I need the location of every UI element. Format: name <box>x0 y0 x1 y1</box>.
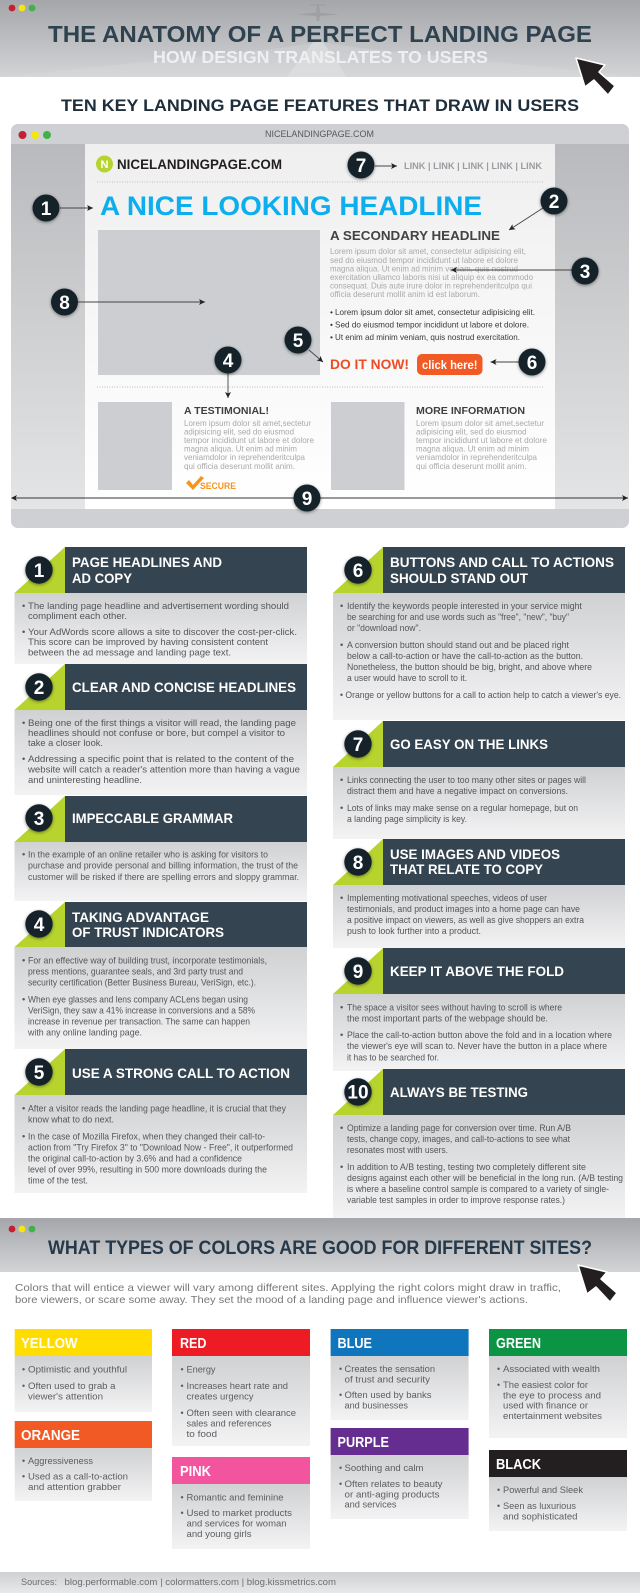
panel: 1 page headlines: • <box>22 626 25 637</box>
panel: 2 clear headlines: and uninteresting headline. <box>28 774 142 785</box>
panel: 4 trust indicators: press mentions, guarantee seals, and 3rd party trust and <box>28 966 243 976</box>
more information: adipisicing elit, sed do eiusmod <box>416 428 527 436</box>
panel: 9 above the fold: Place the call-to-action button above the fold and in a location where <box>347 1029 612 1040</box>
footer: sources: blog.performable.com | colormatters.com | blog.kissmetrics.com <box>64 1577 336 1588</box>
panel: 6 buttons: Identify the keywords people interested in your service might <box>347 600 582 611</box>
panel: 10 always be testing: ALWAYS BE TESTING <box>390 1084 528 1100</box>
card: red: • <box>180 1408 184 1418</box>
arrow: 4 <box>227 373 229 398</box>
panel: 9 above the fold <box>333 948 625 1071</box>
markers: numbered circles: 8 <box>59 293 70 314</box>
panel: 9 above the fold: the most important parts of the webpage should be. <box>347 1012 548 1024</box>
panel: 6 buttons: • <box>340 600 343 611</box>
panel: 2 clear headlines: CLEAR AND CONCISE HEADLINES <box>72 679 296 695</box>
card: blue: and businesses <box>344 1400 409 1410</box>
markers: numbered circles: 4 <box>223 351 234 372</box>
bullet list: Ut enim ad minim veniam, quis nostrud exercitation. <box>335 332 520 342</box>
panel: 10 always be testing: Optimize a landing page for conversion over time. Run A/B <box>347 1122 571 1133</box>
panel: 6 buttons <box>333 547 625 720</box>
panel: 2 clear headlines: • <box>22 753 25 764</box>
card: blue <box>331 1329 469 1420</box>
card: purple <box>331 1428 469 1519</box>
panel: 1 page headlines: compliment each other. <box>28 610 127 621</box>
card: green: The easiest color for <box>503 1380 588 1390</box>
panel: 8 images and videos: a positive impact on viewers, as well as give shoppers an extra <box>347 914 585 925</box>
panel: 4 trust indicators: VeriSign, they saw a 41% increase in conversions and a 58% <box>28 1004 255 1016</box>
card: red: • <box>180 1381 184 1391</box>
panel: 6 buttons: A conversion button should stand out and be placed right <box>347 639 569 650</box>
panel: 3 grammar: 3 <box>34 809 44 830</box>
testimonial image <box>98 402 172 490</box>
bullet list <box>330 307 535 342</box>
card: blue: BLUE <box>338 1336 372 1352</box>
lorem paragraph: exercitation ullamco laboris nisi ut aliquip ex ea commodo <box>330 273 533 282</box>
lorem paragraph: magna aliqua. Ut enim ad minim veniam, quis nostrud <box>330 264 518 274</box>
card: pink <box>172 1457 310 1549</box>
lorem paragraph: consequat. Duis aute irure dolor in reprehenderitculpa qui <box>330 282 532 290</box>
logo: NICELANDINGPAGE.COM <box>117 156 282 172</box>
card: purple: or anti-aging products <box>344 1490 440 1500</box>
panel: 9 above the fold: it has to be searched for. <box>347 1052 439 1062</box>
intro text: bore viewers, or scare some away. They set the mood of a landing page and influence viewer's actions. <box>15 1294 528 1306</box>
arrow: 8 <box>78 301 205 303</box>
button <box>417 354 482 375</box>
panel: 6 buttons: or "download now". <box>347 622 421 633</box>
panel: 8 images and videos <box>333 839 625 948</box>
icon: cursor arrow <box>576 58 615 95</box>
panel: 10 always be testing: variable test samples in order to improve response rates.) <box>347 1194 565 1205</box>
card: red: Energy <box>186 1364 216 1374</box>
card: purple: • <box>339 1463 342 1473</box>
card: green: • <box>497 1364 500 1374</box>
panel: 4 trust indicators: TAKING ADVANTAGE <box>72 909 209 925</box>
panel: 10 always be testing <box>333 1069 625 1218</box>
card: red: Often seen with clearance <box>186 1408 296 1418</box>
card: yellow: viewer's attention <box>28 1392 103 1402</box>
card: yellow: Optimistic and youthful <box>28 1364 127 1374</box>
panel: 2 clear headlines: 2 <box>34 678 44 699</box>
panel: 5 call to action: level of over 99%, resulting in 500 more downloads during the <box>28 1164 267 1174</box>
banner title: WHAT TYPES OF COLORS ARE GOOD FOR DIFFERENT SITES? <box>48 1238 592 1259</box>
card: black: BLACK <box>496 1457 541 1473</box>
lorem paragraph: sed do eiusmod tempor incididunt ut labore et dolore <box>330 256 518 265</box>
panel: 9 above the fold: The space a visitor sees without having to scroll is where <box>347 1002 562 1012</box>
card: green: Associated with wealth <box>503 1364 600 1374</box>
call to action text: DO IT NOW! <box>330 356 409 372</box>
markers: numbered circles <box>32 152 598 512</box>
card: green: • <box>497 1380 500 1390</box>
bullet list: • <box>330 320 333 330</box>
card: pink: and services for woman <box>186 1518 287 1528</box>
testimonial: veniamdolor in reprehenderitculpa <box>184 453 305 462</box>
panel: 4 trust indicators: When eye glasses and lens company ACLens began using <box>28 994 248 1004</box>
section banner: colors <box>0 1218 640 1272</box>
card: orange: Aggressiveness <box>28 1456 94 1466</box>
panel: 7 links: Links connecting the user to too many other sites or pages will <box>347 774 586 785</box>
runway <box>287 42 347 77</box>
panel: 8 images and videos: THAT RELATE TO COPY <box>390 861 544 877</box>
testimonial <box>184 405 314 471</box>
testimonial: magna aliqua. Ut enim ad minim <box>184 444 297 454</box>
card: red: Increases heart rate and <box>186 1381 288 1391</box>
panel: 6 buttons: SHOULD STAND OUT <box>390 570 528 586</box>
markers: numbered circles: 5 <box>293 331 304 352</box>
more information: MORE INFORMATION <box>416 405 525 417</box>
panel: 4 trust indicators: • <box>22 954 25 966</box>
card: blue: Often used by banks <box>344 1390 432 1400</box>
panel: 6 buttons: BUTTONS AND CALL TO ACTIONS <box>390 554 614 570</box>
card: pink: Romantic and feminine <box>186 1492 284 1502</box>
card: pink: • <box>180 1508 184 1518</box>
card: green: used with finance or <box>503 1400 588 1410</box>
panel: 8 images and videos: 8 <box>353 853 363 874</box>
card: blue: • <box>339 1390 342 1400</box>
intro text <box>15 1282 561 1306</box>
testimonial: adipisicing elit, sed do eiusmod <box>184 428 294 436</box>
card: pink: Used to market products <box>186 1508 293 1518</box>
panel: 2 clear headlines <box>14 664 307 795</box>
card: yellow: • <box>22 1381 25 1391</box>
card: red: • <box>180 1364 184 1374</box>
panel: 5 call to action: 5 <box>34 1063 45 1084</box>
panel: 7 links: a landing page simplicity is key. <box>347 813 467 824</box>
panel: 6 buttons: a user would have to scroll to it. <box>347 672 467 683</box>
panel: 1 page headlines: 1 <box>34 561 45 582</box>
panel: 6 buttons: 6 <box>353 561 363 582</box>
panel: 10 always be testing: resonates most with users. <box>347 1144 448 1155</box>
panel: 8 images and videos: • <box>340 892 343 903</box>
section heading: ten key features: TEN KEY LANDING PAGE FEATURES THAT DRAW IN USERS <box>61 96 579 115</box>
markers: numbered circles: 6 <box>527 353 537 374</box>
panel: 1 page headlines: Your AdWords score allows a site to discover the cost-per-click. <box>28 626 297 637</box>
card: orange: and attention grabber <box>28 1482 121 1492</box>
secure badge: SECURE <box>200 481 236 491</box>
info image <box>331 402 404 490</box>
card: red: to food <box>186 1429 217 1439</box>
panel: 5 call to action: know what to do next. <box>28 1114 114 1124</box>
button: click here! <box>422 358 478 372</box>
panel: 5 call to action: time of the test. <box>28 1174 88 1186</box>
secondary headline: A SECONDARY HEADLINE <box>330 229 500 243</box>
card: black: Powerful and Sleek <box>503 1485 584 1495</box>
card: green <box>489 1329 627 1438</box>
panel: 10 always be testing: • <box>340 1122 343 1133</box>
card: orange: • <box>22 1472 25 1482</box>
panel: 3 grammar: customer will be risked if there are spelling errors and sloppy grammar. <box>28 871 299 882</box>
panel: 5 call to action: In the case of Mozilla Firefox, when they changed their call-to- <box>28 1130 265 1142</box>
panel: 8 images and videos: push to look further into a product. <box>347 925 481 936</box>
bullet list: • <box>330 332 333 342</box>
panel: 5 call to action <box>14 1049 307 1193</box>
card: orange: ORANGE <box>21 1428 80 1444</box>
banner lights <box>9 1226 35 1232</box>
card: purple: PURPLE <box>338 1435 389 1451</box>
panel: 4 trust indicators: with any online landing page. <box>27 1026 142 1038</box>
panel: 5 call to action: After a visitor reads the landing page headline, it is crucial that they <box>28 1102 286 1114</box>
panel: 2 clear headlines: website will catch a reader's attention more than having a vague <box>27 764 300 774</box>
card: pink: and young girls <box>186 1529 252 1539</box>
header banner <box>0 0 640 77</box>
arrow: 6 <box>490 361 519 363</box>
browser url: NICELANDINGPAGE.COM <box>265 129 374 139</box>
card: purple: • <box>339 1479 342 1489</box>
panel: 6 buttons: • Orange or yellow buttons for a call to action help to catch a viewer's eye. <box>340 689 621 700</box>
panel: 7 links: Lots of links may make sense on a regular homepage, but on <box>347 802 578 813</box>
card: black <box>489 1450 627 1531</box>
markers: numbered circles: 9 <box>302 489 312 510</box>
panel: 7 links <box>333 721 625 839</box>
panel: 5 call to action: • <box>22 1130 25 1142</box>
panel: 9 above the fold: • <box>340 1002 343 1012</box>
panel: 2 clear headlines: headlines should not confuse or bore, but compel a visitor to <box>28 727 285 738</box>
arrow: 5 <box>309 350 323 362</box>
card: yellow: YELLOW <box>21 1336 78 1352</box>
panel: 5 call to action: • <box>22 1102 25 1114</box>
more information: Lorem ipsum dolor sit amet,sectetur <box>416 419 544 428</box>
panel: 2 clear headlines: Being one of the first things a visitor will read, the landing page <box>28 717 296 728</box>
panel: 9 above the fold: KEEP IT ABOVE THE FOLD <box>390 963 564 979</box>
panel: 4 trust indicators <box>14 902 307 1049</box>
arrow: 2 <box>509 208 543 230</box>
main headline: A NICE LOOKING HEADLINE <box>100 191 482 221</box>
panel: 10 always be testing: In addition to A/B testing, testing two completely different site <box>347 1161 586 1172</box>
panel: 7 links: GO EASY ON THE LINKS <box>390 736 548 752</box>
panel: 2 clear headlines: Addressing a specific point that is related to the content of the <box>28 753 294 764</box>
panel: 4 trust indicators: increase in revenue per transaction. The same can happen <box>28 1016 250 1026</box>
card: blue: Creates the sensation <box>344 1364 435 1374</box>
testimonial: Lorem ipsum dolor sit amet,sectetur <box>184 419 311 428</box>
panel: 3 grammar: In the example of an online retailer who is asking for visitors to <box>28 848 268 860</box>
testimonial: A TESTIMONIAL! <box>184 405 269 417</box>
card: purple: Soothing and calm <box>344 1463 424 1473</box>
panel: 10 always be testing: • <box>340 1161 343 1172</box>
panel: 10 always be testing: tests, change copy, images, and call-to-actions to see what <box>347 1133 570 1144</box>
arrow: 1 <box>60 207 93 209</box>
panel: 4 trust indicators: 4 <box>34 915 45 936</box>
panel: 4 trust indicators: • <box>22 994 25 1004</box>
panel: 9 above the fold: • <box>340 1029 343 1040</box>
page area <box>85 144 555 509</box>
card: black: • <box>497 1501 500 1511</box>
lorem paragraph <box>330 247 533 299</box>
panel: 2 clear headlines: take a closer look. <box>28 737 103 748</box>
footer: sources <box>0 1572 640 1593</box>
panel: 3 grammar: purchase and provide personal and billing information, the trust of the <box>28 860 298 870</box>
card: yellow: • <box>22 1364 25 1374</box>
panel: 10 always be testing: is where a baseline control sample is compared to a variety of single- <box>347 1183 609 1194</box>
panel: 9 above the fold: the viewer's eye will scan to. Never have the button in a place where <box>347 1040 607 1051</box>
bullet list: • <box>330 307 333 317</box>
panel: 8 images and videos: Implementing motivational speeches, videos of user <box>347 892 547 903</box>
secure badge <box>186 476 236 491</box>
card: black: • <box>497 1485 500 1495</box>
card: orange: Used as a call-to-action <box>28 1472 128 1482</box>
lorem paragraph: Lorem ipsum dolor sit amet, consectetur adipisicing elit, <box>330 247 526 256</box>
arrow: 7 <box>375 165 397 167</box>
panel: 1 page headlines: between the ad message and landing page text. <box>28 646 231 658</box>
browser lights <box>18 131 51 139</box>
nav links: LINK | LINK | LINK | LINK | LINK <box>404 161 542 172</box>
panel: 8 images and videos: USE IMAGES AND VIDEOS <box>390 846 560 862</box>
icon: plane silhouette <box>297 4 339 21</box>
panel: 3 grammar: IMPECCABLE GRAMMAR <box>72 810 233 826</box>
logo: N <box>101 159 109 171</box>
more information: veniamdolor in reprehenderitculpa <box>416 453 537 462</box>
more information: magna aliqua. Ut enim ad minim <box>416 444 529 454</box>
panel: 1 page headlines <box>14 547 307 664</box>
markers: numbered circles: 1 <box>41 199 52 220</box>
subtitle: HOW DESIGN TRANSLATES TO USERS <box>153 47 488 67</box>
hero image placeholder <box>98 230 320 375</box>
card: yellow <box>15 1329 152 1412</box>
card: blue: • <box>339 1364 342 1374</box>
panel: 5 call to action: the original call-to-action by 3.6% and had a confidence <box>28 1152 242 1164</box>
arrow: 9 <box>12 497 628 499</box>
lorem paragraph: officia deserunt mollit anim id est laborum. <box>330 290 480 299</box>
card: green: GREEN <box>496 1336 541 1352</box>
panel: 6 buttons: Nonetheless, the button should be big, bright, and above where <box>347 661 592 672</box>
card: red: sales and references <box>186 1418 272 1428</box>
testimonial: qui officia deserunt mollit anim. <box>184 462 295 471</box>
testimonial: tempor incididunt ut labore et dolore <box>184 436 314 445</box>
bullet list: Sed do eiusmod tempor incididunt ut labore et dolore. <box>335 320 529 330</box>
card: pink: PINK <box>180 1464 211 1480</box>
card: black: and sophisticated <box>503 1512 578 1522</box>
window lights <box>9 5 35 11</box>
card: red: creates urgency <box>186 1392 254 1402</box>
more information: qui officia deserunt mollit anim. <box>416 462 526 471</box>
panel: 8 images and videos: testimonials, and product images into a home page can have <box>347 903 580 914</box>
browser mockup <box>11 124 629 528</box>
card: blue: of trust and security <box>344 1374 431 1384</box>
title: THE ANATOMY OF A PERFECT LANDING PAGE <box>48 21 592 47</box>
panel: 7 links: • <box>340 802 343 813</box>
panel: 7 links: • <box>340 774 343 785</box>
intro text: Colors that will entice a viewer will vary among different sites. Applying the right colors might draw in traffic, <box>15 1282 561 1294</box>
card: green: entertainment websites <box>503 1411 603 1421</box>
panel: 4 trust indicators: security certification (Better Business Bureau, VeriSign, etc.). <box>28 976 256 988</box>
panel: 3 grammar <box>14 796 307 901</box>
panel: 7 links: distract them and have a negative impact on conversions. <box>347 785 568 796</box>
panel: 3 grammar: • <box>22 848 25 860</box>
panel: 5 call to action: action from "Try Firefox 3" to "Download Now - Free", it outperformed <box>28 1142 293 1152</box>
panel: 1 page headlines: PAGE HEADLINES AND <box>72 554 222 570</box>
panel: 4 trust indicators: OF TRUST INDICATORS <box>72 924 224 940</box>
arrow: 3 <box>451 269 572 271</box>
panel: 6 buttons: be searching for and use words such as "free", "new", "buy" <box>347 611 569 622</box>
markers: numbered circles: 3 <box>580 262 590 283</box>
panel: 10 always be testing: designs against each other will be beneficial in the long run. (A/B testing <box>347 1172 623 1183</box>
icon: cursor arrow 2 <box>578 1265 617 1302</box>
markers: numbered circles: 7 <box>356 156 366 177</box>
panel: 10 always be testing: 10 <box>347 1082 369 1104</box>
more information: tempor incididunt ut labore et dolore <box>416 436 547 445</box>
footer: sources: Sources: <box>21 1577 57 1588</box>
panel: 5 call to action: USE A STRONG CALL TO ACTION <box>72 1065 290 1081</box>
more information <box>416 405 547 471</box>
card: black: Seen as luxurious <box>503 1501 577 1511</box>
panel: 6 buttons: below a call-to-action or have the call-to-action as the button. <box>347 650 583 661</box>
panel: 1 page headlines: • <box>22 600 25 611</box>
card: orange: • <box>22 1456 25 1466</box>
card: pink: • <box>180 1492 184 1502</box>
panel: 2 clear headlines: • <box>22 717 25 728</box>
panel: 7 links: 7 <box>353 735 363 756</box>
panel: 1 page headlines: AD COPY <box>72 570 133 586</box>
card: purple: Often relates to beauty <box>344 1479 443 1489</box>
card: orange <box>15 1421 152 1501</box>
panel: 6 buttons: • <box>340 639 343 650</box>
markers: numbered circles: 2 <box>549 192 559 213</box>
card: green: the eye to process and <box>503 1390 601 1400</box>
panel: 4 trust indicators: For an effective way of building trust, incorporate testimonials, <box>28 954 267 966</box>
panel: 9 above the fold: 9 <box>353 962 363 983</box>
card: yellow: Often used to grab a <box>28 1381 116 1391</box>
panel: 1 page headlines: The landing page headline and advertisement wording should <box>28 600 289 611</box>
bullet list: Lorem ipsum dolor sit amet, consectetur adipisicing elit. <box>335 307 535 317</box>
card: purple: and services <box>344 1500 397 1510</box>
card: red: RED <box>180 1336 206 1352</box>
card: red <box>172 1329 310 1446</box>
panel: 1 page headlines: This score can be improved by having consistent content <box>28 636 268 647</box>
